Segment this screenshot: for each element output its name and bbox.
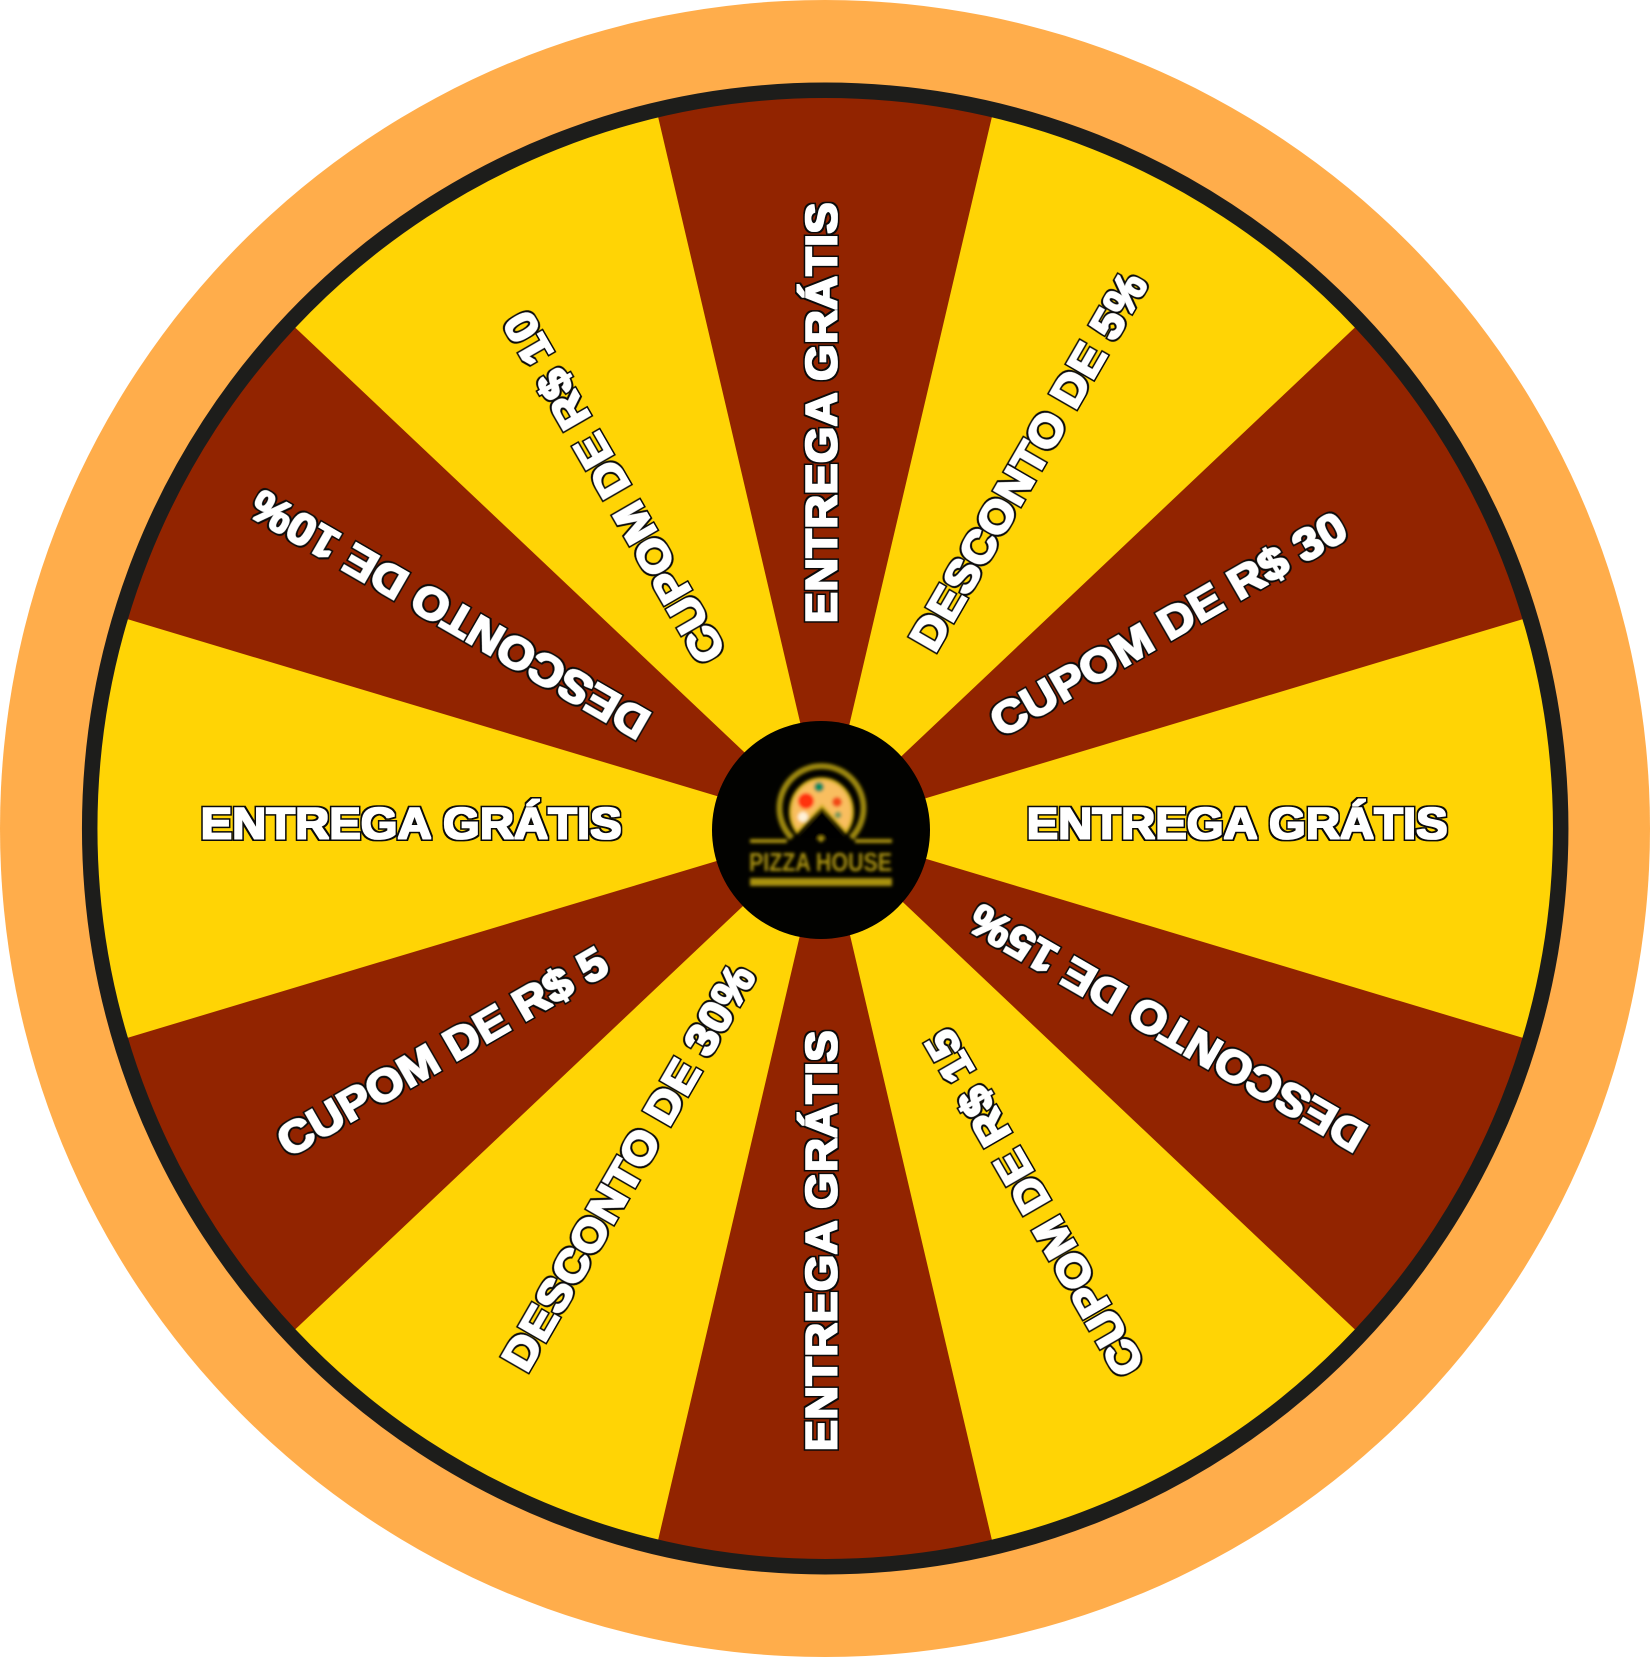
center logo disc [712, 721, 930, 939]
label: desconto de 30%: DESCONTO DE 30% [493, 956, 765, 1379]
label: desconto de 10%: DESCONTO DE 10% [242, 480, 658, 748]
label: entrega gratis right: ENTREGA GRÁTIS [1027, 799, 1448, 848]
logo: pizza house [749, 766, 892, 886]
house roof wedge [802, 811, 842, 838]
toppings [798, 793, 814, 809]
dark ring [90, 90, 1561, 1567]
red wedges [116, 88, 1534, 1569]
label: cupom de R$ 15: CUPOM DE R$ 15 [916, 1021, 1154, 1384]
label: entrega gratis bottom: ENTREGA GRÁTIS [797, 1030, 846, 1451]
right top bar [855, 839, 892, 843]
pizza circle [790, 779, 852, 832]
black disc [712, 721, 930, 939]
outer horseshoe arc [780, 766, 864, 838]
left top bar [750, 839, 787, 843]
label: cupom de R$ 5: CUPOM DE R$ 5 [269, 938, 616, 1167]
label: entrega gratis left: ENTREGA GRÁTIS [201, 799, 622, 848]
label: cupom de R$ 10: CUPOM DE R$ 10 [494, 303, 735, 671]
wheel [90, 88, 1561, 1569]
yellow wheel base [93, 94, 1557, 1564]
lower bar [750, 878, 892, 886]
door dot [818, 836, 824, 842]
logo wordmark: PIZZA HOUSE [749, 847, 892, 877]
label: desconto de 15%: DESCONTO DE 15% [961, 894, 1375, 1161]
label: desconto de 5%: DESCONTO DE 5% [901, 264, 1157, 659]
label: entrega gratis top: ENTREGA GRÁTIS [797, 202, 846, 623]
label: cupom de R$ 30: CUPOM DE R$ 30 [982, 503, 1355, 747]
